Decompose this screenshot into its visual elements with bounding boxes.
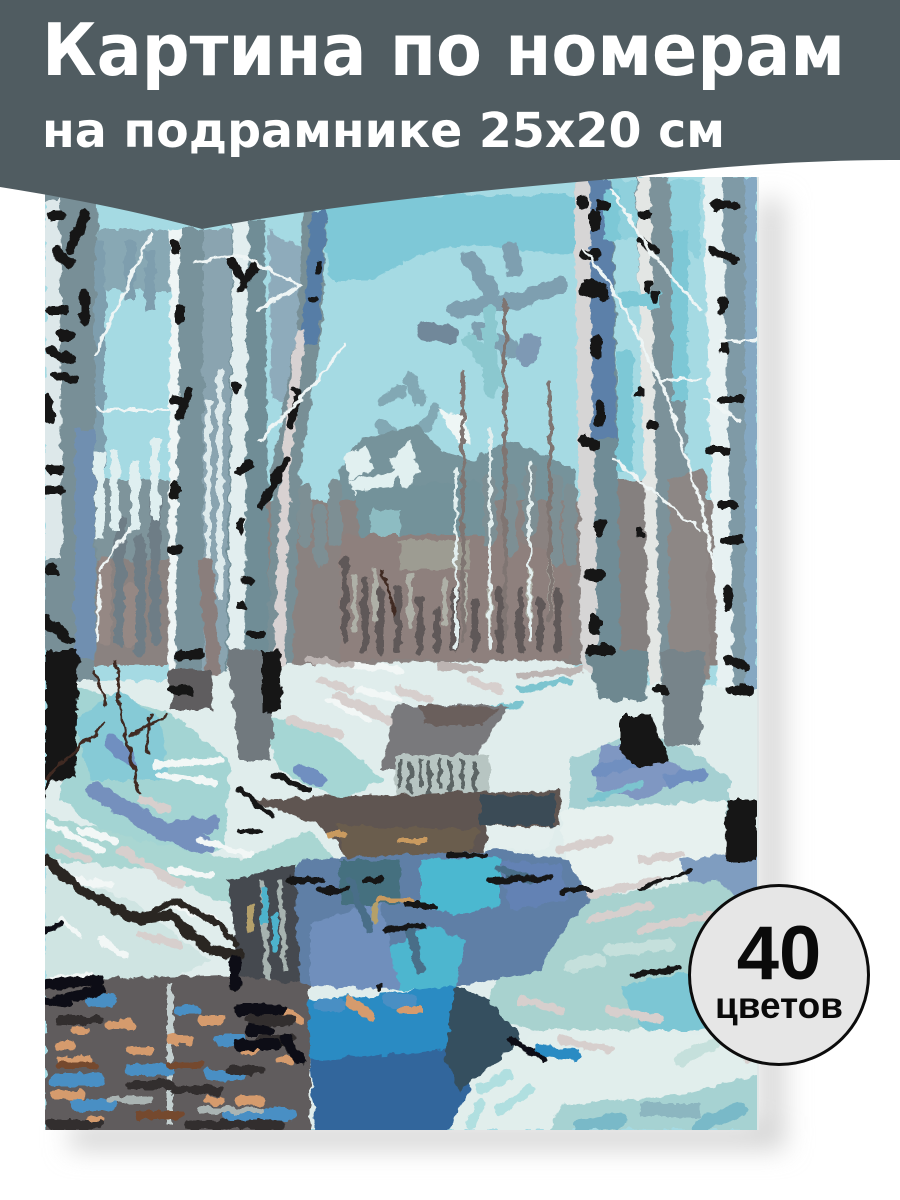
canvas drop shadow (70, 200, 785, 1149)
painting: winter birch forest (30, 170, 770, 1135)
distant forest (90, 300, 730, 670)
subtitle: на подрамнике 25х20 см (42, 103, 725, 159)
birch bark marks (45, 200, 750, 690)
orange and blue reflections (50, 835, 530, 1125)
badge: 40 colours (690, 886, 868, 1064)
right birch trees (573, 177, 757, 690)
snow brush dabs (50, 660, 750, 1125)
dark branches and shadows over the stream (45, 775, 690, 1080)
canvas side edge (757, 177, 759, 1130)
left birch trees (45, 194, 328, 682)
sky (322, 178, 708, 502)
badge number: 40 (737, 911, 821, 996)
snow ground (45, 660, 760, 1130)
title: Картина по номерам (42, 8, 845, 92)
badge caption: цветов (715, 985, 843, 1026)
tree bases (45, 650, 757, 862)
white birch branches (95, 190, 760, 640)
stream and reflections (45, 705, 590, 1135)
header banner (0, 0, 900, 229)
